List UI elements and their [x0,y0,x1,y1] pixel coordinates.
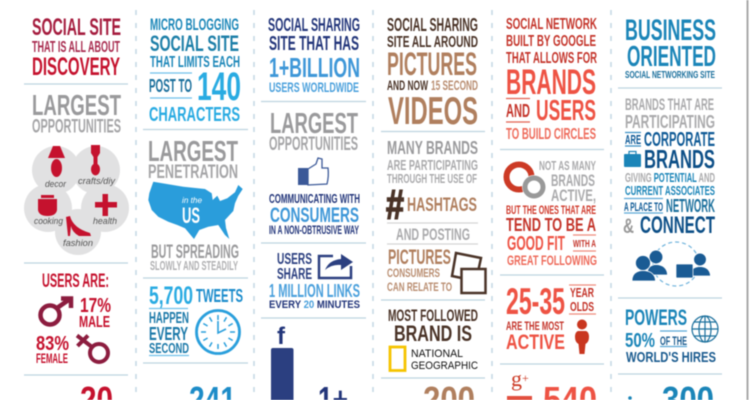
logo: National Geographic [390,347,478,372]
stat: users gender split [36,271,111,366]
chart: linkedin label [628,379,714,400]
chart: google plus bar: + [522,371,529,385]
heading: pictures and videos [387,15,478,133]
text: largest opportunities [269,108,358,155]
chart: google plus bar [507,366,597,400]
stat: 25-35 year olds: OLDS [570,299,594,314]
panel: Twitter column [148,16,243,400]
stat: 5,700 tweets [149,282,243,357]
text: communicating with consumers: IN A NON-OBTRUSIVE WAY [269,225,359,237]
panel: LinkedIn column [623,14,718,400]
icons: category circles: decor [45,179,67,189]
text: largest opportunities: LARGEST [32,90,121,122]
text: not as many brands: TEND TO BE A [506,215,596,235]
text: corporate brands: A PLACE TO [624,202,663,214]
stat: users share links: 1 MILLION LINKS [269,281,360,301]
icon: network people [632,242,710,286]
heading: social site discovery [32,14,121,81]
icon: person [575,320,589,354]
stat: powers 50 percent of hires: POWERS [625,305,687,330]
text: pictures consumers relate to: PICTURES [388,246,451,269]
text: most followed brand: BRAND IS [394,321,472,346]
stat: 5,700 tweets: TWEETS [196,286,243,306]
stat: 25-35 year olds: 25-35 [506,281,565,322]
heading: social sharing site: SOCIAL SHARING [268,15,360,35]
text: largest opportunities: OPPORTUNITIES [32,116,121,138]
icon: globe [692,316,718,342]
stat: users share links: SHARE [277,266,312,283]
heading: social sharing site: 1+BILLION [269,52,360,83]
chart: google plus bar: g [511,366,522,391]
heading: social sharing site: SITE THAT HAS [269,32,359,55]
stat: users share links: USERS [277,251,312,268]
panel: Facebook column [268,15,360,400]
icon: female symbol [77,336,108,362]
stat: 25-35 year olds: YEAR [570,285,594,300]
panel: Instagram column [386,15,486,400]
text: largest opportunities [32,90,121,138]
text: many brands hashtags: # [386,181,404,228]
icon: thumbs up [298,158,328,185]
heading: social site discovery: DISCOVERY [32,53,120,81]
stat: users share links: EVERY 20 MINUTES [269,299,360,311]
text: not as many brands: GOOD FIT [507,233,565,255]
text: many brands hashtags: THROUGH THE USE OF [387,171,477,186]
text: many brands hashtags: ARE PARTICIPATING [387,157,478,174]
heading: built by google: BUILT BY GOOGLE [506,33,596,50]
stat: 5,700 tweets: EVERY [149,324,188,344]
text: but spreading: BUT SPREADING [151,241,239,263]
heading: built by google: BRANDS [506,63,596,102]
text: corporate brands: & [623,215,634,238]
heading: built by google: SOCIAL NETWORK [506,16,598,33]
text: communicating with consumers: COMMUNICATING WITH [269,192,360,206]
text: not as many brands: BUT THE ONES THAT ARE [506,205,596,217]
logo: National Geographic: NATIONAL [411,348,463,360]
chart: facebook bar: f [277,323,286,350]
text: but spreading [150,241,239,273]
heading: business oriented [625,14,716,81]
heading: built by google [506,16,598,143]
heading: built by google: USERS [536,95,596,127]
heading: pictures and videos: PICTURES [387,46,477,82]
stat: users gender split: 17% [80,295,111,317]
stat: 25-35 year olds: ARE THE MOST [506,319,564,333]
text: most followed brand [388,306,478,346]
text: corporate brands [623,96,715,239]
icon: US map [148,182,243,239]
panel: Pinterest column [24,14,129,400]
text: many brands hashtags: MANY BRANDS [387,137,478,158]
icon: US map: in the [182,196,203,205]
text: not as many brands: ACTIVE, [551,186,596,205]
text: largest opportunities: OPPORTUNITIES [269,134,358,155]
text: not as many brands: NOT AS MANY [539,159,596,173]
heading: micro blogging: THAT LIMITS EACH [150,54,240,71]
heading: micro blogging: SOCIAL SITE [150,31,239,56]
logo: National Geographic: GEOGRAPHIC [411,360,478,372]
heading: pictures and videos: VIDEOS [388,90,478,133]
text: largest opportunities: LARGEST [270,108,358,140]
text: many brands hashtags [386,137,478,244]
heading: pictures and videos: AND NOW [387,77,428,93]
stat: 5,700 tweets: SECOND [149,341,189,357]
heading: pictures and videos: SITE ALL AROUND [387,34,478,51]
stat: powers 50 percent of hires: OF THE [660,334,687,348]
stat: 5,700 tweets: HAPPEN [149,310,189,327]
icons: category circles: health [93,216,117,226]
stat: users gender split: FEMALE [36,350,68,366]
heading: built by google: THAT ALLOWS FOR [506,50,597,67]
heading: micro blogging [149,16,241,126]
text: corporate brands: GIVING POTENTIAL AND [625,171,715,185]
stat: powers 50 percent of hires [625,305,718,366]
text: not as many brands: WITH A [573,239,596,250]
heading: social sharing site [268,15,360,95]
stat: powers 50 percent of hires: WORLD'S HIRES [626,349,716,366]
icon: photo frames [452,253,486,293]
icon: google circles [506,164,546,199]
stat: powers 50 percent of hires: 50% [625,330,655,352]
heading: social sharing site: USERS WORLDWIDE [269,79,359,95]
icons: category circles: crafts/diy [78,176,116,186]
heading: social site discovery: THAT IS ALL ABOUT [32,39,120,56]
stat: users gender split: 83% [36,333,69,355]
heading: social site discovery: SOCIAL SITE [32,14,121,41]
text: largest penetration: LARGEST [148,136,238,168]
icon: share arrow [319,254,353,278]
heading: micro blogging: MICRO BLOGGING [150,16,239,34]
text: pictures consumers relate to: CAN RELATE TO [387,282,452,294]
heading: micro blogging: CHARACTERS [149,103,240,126]
icons: category circles: cooking [34,216,63,226]
text: but spreading: SLOWLY AND STEADILY [150,258,238,273]
heading: pictures and videos: 15 SECOND [431,77,478,93]
heading: micro blogging: POST TO [149,76,192,96]
text: pictures consumers relate to: CONSUMERS [387,268,440,280]
text: largest penetration [148,136,238,183]
chart: facebook bar [271,323,348,400]
panel: Google+ column [506,16,598,400]
text: not as many brands: BRANDS [551,172,595,190]
text: corporate brands: ARE [625,133,641,147]
stat: 25-35 year olds: ACTIVE [506,331,565,354]
stat: users gender split: USERS ARE: [42,271,109,292]
stat: users share links [269,251,360,311]
heading: built by google: TO BUILD CIRCLES [506,126,596,143]
text: many brands hashtags: AND POSTING [396,226,470,244]
heading: built by google: AND [506,101,530,121]
stat: 5,700 tweets: 5,700 [149,282,193,310]
icon: US map: US [182,203,200,228]
text: communicating with consumers [269,192,360,237]
heading: micro blogging: 140 [197,65,241,109]
text: largest penetration: PENETRATION [148,162,238,183]
icon: briefcase [624,152,641,167]
text: many brands hashtags: HASHTAGS [407,195,477,216]
icon: clock [196,310,240,354]
stat: 25-35 year olds [506,281,596,354]
icons: category circles: fashion [63,238,93,248]
icon: male symbol [40,298,71,324]
text: pictures consumers relate to [387,246,452,294]
text: communicating with consumers: CONSUMERS [270,204,359,227]
icons: category circles [24,145,129,255]
heading: pictures and videos: SOCIAL SHARING [387,15,478,35]
text: not as many brands [506,159,597,268]
text: most followed brand: MOST FOLLOWED [388,306,478,325]
stat: users gender split: MALE [79,314,110,331]
text: not as many brands: GREAT FOLLOWING [507,252,597,268]
